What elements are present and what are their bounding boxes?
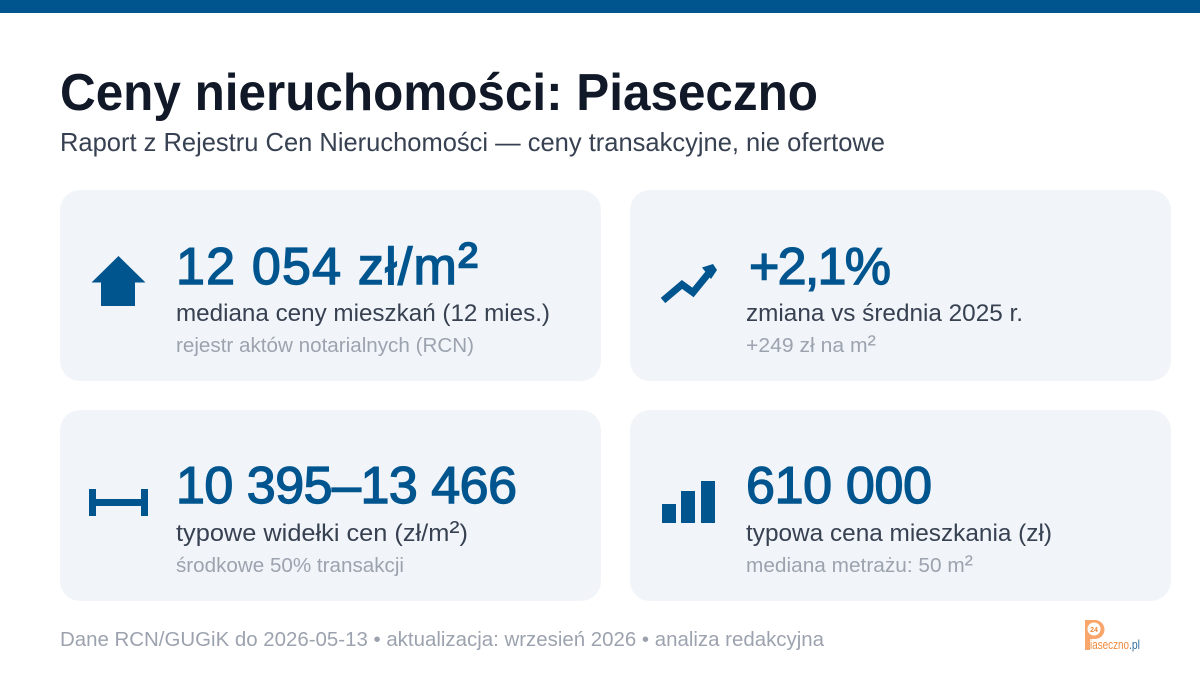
- subtitle: Raport z Rejestru Cen Nieruchomości — ceny transakcyjne, nie ofertowe: [60, 127, 885, 157]
- median value: 12 054 zł/m²: [176, 230, 478, 297]
- change value: +2,1%: [749, 238, 891, 296]
- icon: bar chart: [662, 481, 715, 523]
- icon: trend arrow: [663, 264, 717, 300]
- panel: change: [630, 190, 1171, 381]
- median label: mediana ceny mieszkań (12 mies.): [176, 300, 550, 327]
- typical price value: 610 000: [746, 457, 932, 515]
- typical price note: mediana metrażu: 50 m ²: [746, 551, 973, 578]
- logo: .pl: [1129, 637, 1140, 652]
- icon: house: [92, 256, 146, 306]
- icon: range bracket: [89, 489, 148, 516]
- top bar: [0, 0, 1200, 13]
- panel: median price: [60, 190, 601, 381]
- median note: rejestr aktów notarialnych (RCN): [176, 335, 474, 357]
- logo: iaseczno: [1090, 637, 1129, 652]
- change label: zmiana vs średnia 2025 r.: [746, 300, 1023, 327]
- range value: 10 395–13 466: [176, 457, 517, 515]
- title: Ceny nieruchomości: Piaseczno: [60, 64, 818, 122]
- panel: price range: [60, 410, 601, 601]
- panel: typical price: [630, 410, 1171, 601]
- change note: +249 zł na m ²: [746, 331, 876, 358]
- logo: 24: [1090, 627, 1098, 634]
- typical price label: typowa cena mieszkania (zł): [746, 520, 1052, 547]
- range note: środkowe 50% transakcji: [176, 555, 404, 577]
- range label: typowe widełki cen (zł/m ²): [176, 516, 468, 548]
- footer: Dane RCN/GUGiK do 2026-05-13 • aktualizacja: wrzesień 2026 • analiza redakcyjna: [60, 629, 825, 651]
- logo: [1085, 620, 1140, 652]
